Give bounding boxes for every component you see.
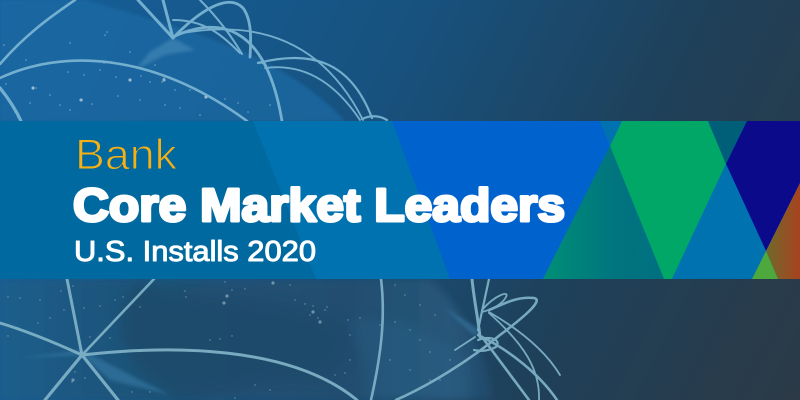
city lights: lower	[8, 282, 450, 398]
heading: Core Market Leaders: Core Market Leaders	[73, 179, 565, 231]
light glow at lower hubs	[20, 308, 480, 395]
network lines: upper globe	[0, 0, 387, 121]
shape: light green triangle	[752, 251, 778, 279]
heading: Bank: Bank	[75, 131, 178, 179]
shape: orange polygon	[766, 183, 800, 279]
city lights: upper	[4, 32, 270, 115]
shape: dark teal triangle	[708, 121, 747, 164]
shape: navy polygon	[726, 121, 800, 251]
shape: green diamond	[610, 121, 726, 279]
band section: left	[0, 121, 800, 279]
subheading: U.S. Installs 2020: U.S. Installs 2020	[74, 236, 316, 268]
shape: top small triangle	[600, 121, 622, 146]
band section: bright blue	[392, 121, 800, 279]
globe: upper section	[0, 0, 345, 121]
shape: teal triangle	[543, 146, 664, 279]
network lines: lower globe	[0, 279, 560, 400]
globe: lower section	[0, 279, 492, 400]
banner band	[0, 121, 800, 279]
light glow at upper hub	[135, 38, 195, 70]
shape: blue polygon	[672, 164, 766, 279]
band section: middle	[253, 121, 800, 279]
